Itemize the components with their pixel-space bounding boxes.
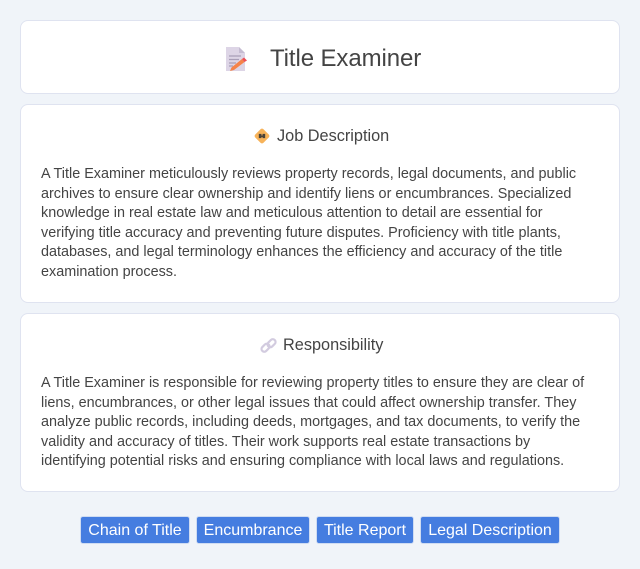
text: responsibility body (41, 375, 584, 469)
icon: document with pencil (226, 47, 247, 71)
text: job description body: archives to ensure clear ownership and identify liens or encumbrances. Specialized (41, 186, 571, 202)
tag: Encumbrance (196, 516, 310, 544)
text: responsibility body: analyze public records, including deeds, mortgages, and tax documents, to verify the (41, 414, 580, 430)
tag: Legal Description: Legal Description (428, 522, 552, 539)
tag: Title Report (316, 516, 414, 544)
heading: Job Description: Job Description (277, 127, 389, 145)
text: job description body: knowledge in real estate law and meticulous attention to detail are essential for (41, 205, 543, 221)
icon: chain link (260, 338, 277, 353)
text: responsibility body: liens, encumbrances, or other legal issues that could affect ownership transfer. They (41, 395, 576, 411)
heading: Title Examiner: Title Examiner (270, 45, 421, 72)
text: responsibility body: identifying potential risks and ensuring compliance with local laws and regulations. (41, 453, 564, 469)
tag: Chain of Title (80, 516, 190, 544)
text: job description body: verifying title accuracy and preventing future disputes. Proficiency with title plants, (41, 225, 561, 241)
tag: Legal Description (420, 516, 560, 544)
text: job description body: databases, and legal terminology enhances the efficiency and accuracy of the title (41, 244, 562, 260)
icon: orange diamond (254, 128, 270, 144)
text: job description body: examination process. (41, 264, 177, 280)
panel: responsibility (20, 313, 620, 492)
tag: Encumbrance: Encumbrance (204, 522, 302, 539)
tag: Chain of Title: Chain of Title (88, 522, 182, 539)
panel: title (20, 20, 620, 94)
text: responsibility body: validity and accuracy of titles. Their work supports real estate transactions by (41, 434, 530, 450)
panel: job description (20, 104, 620, 303)
tag: Title Report: Title Report (324, 522, 406, 539)
text: job description body (41, 166, 576, 280)
text: responsibility body: A Title Examiner is responsible for reviewing property titles to ensure they are clear of (41, 375, 584, 391)
heading: Responsibility: Responsibility (283, 336, 383, 354)
text: job description body: A Title Examiner meticulously reviews property records, legal documents, and public (41, 166, 576, 182)
